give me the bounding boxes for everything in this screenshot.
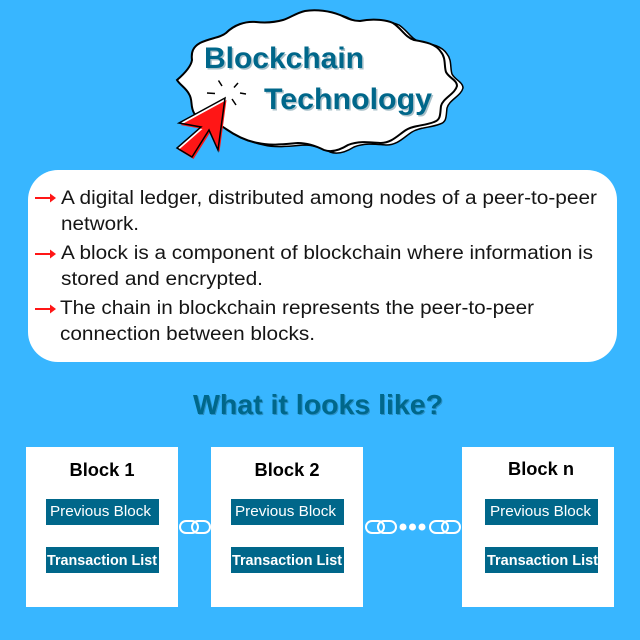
transaction list label: Transaction List [47, 553, 157, 569]
panel: description [28, 170, 617, 362]
bullet text 2: stored and encrypted. [61, 269, 263, 290]
previous block label: Previous Block [490, 504, 592, 520]
title text: Technology: Technology [264, 83, 432, 116]
transaction list label: Transaction List [232, 553, 342, 569]
bullet text 3 [60, 298, 535, 345]
title cloud [177, 10, 463, 153]
transaction list label: Transaction List [487, 553, 598, 569]
heading: what it looks like: What it looks like? [193, 389, 443, 420]
heading: what it looks like: What it looks like? [194, 390, 444, 421]
title text: Blockchain: Blockchain [204, 42, 364, 75]
panel: block n: Block n [508, 459, 574, 479]
panel: block 2: Block 2 [254, 460, 320, 480]
arrow: bullet 3 [35, 304, 56, 314]
panel: block 1 [26, 447, 178, 607]
icon: cursor click [177, 80, 246, 159]
previous block label: Previous Block [235, 504, 337, 520]
title text: Blockchain: Blockchain [206, 44, 366, 76]
bullet text 2 [61, 243, 593, 290]
previous block label [485, 499, 598, 525]
bullet text 1: network. [61, 214, 139, 235]
arrow: bullet 2 [35, 250, 56, 258]
transaction list label [231, 547, 344, 573]
bullet text 1: A digital ledger, distributed among nodes of a peer-to-peer [61, 188, 598, 209]
previous block label: Previous Block [50, 504, 152, 520]
bullet text 3: connection between blocks. [60, 324, 315, 345]
title text: Technology: Technology [266, 84, 434, 118]
bullet text 3: The chain in blockchain represents the peer-to-peer [60, 298, 535, 319]
panel: block 1: Block 1 [70, 460, 134, 480]
bullet text 2: A block is a component of blockchain where information is [61, 243, 593, 264]
transaction list label [46, 547, 159, 573]
transaction list label [485, 547, 598, 573]
panel: block n [462, 447, 614, 607]
icon: chain link with dots [366, 521, 460, 533]
bullet text 1 [61, 188, 598, 235]
previous block label [46, 499, 159, 525]
previous block label [231, 499, 344, 525]
icon: chain link 1 [180, 521, 210, 533]
arrow: bullet 1 [35, 194, 56, 202]
panel: block 2 [211, 447, 363, 607]
